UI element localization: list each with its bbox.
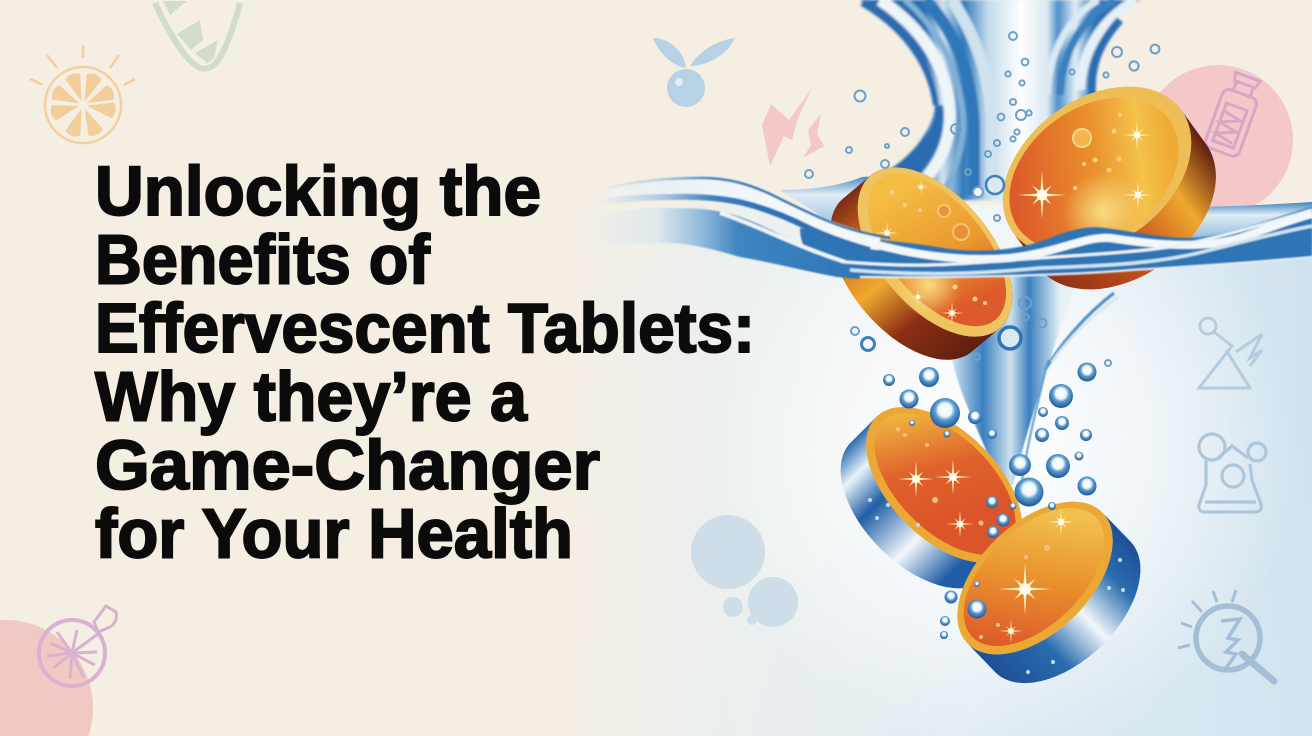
sparkles on lower tablets xyxy=(868,427,1125,674)
rising bubbles upper xyxy=(805,32,1159,366)
wave lower lobe xyxy=(590,208,860,279)
tablet face: upper left xyxy=(842,149,1032,351)
title: Benefits of xyxy=(95,220,431,298)
icon: pink citrus wheel xyxy=(39,606,116,686)
rising bubbles lower xyxy=(883,362,1096,639)
pink circle bottom left xyxy=(0,620,93,736)
icon: bell triangle xyxy=(1199,318,1262,388)
tablet face: upper right xyxy=(980,66,1208,282)
title: for Your Health xyxy=(95,494,573,572)
icon: green leaf xyxy=(155,1,240,69)
tablet: lower right xyxy=(929,473,1169,712)
pink circle top right xyxy=(1143,65,1293,215)
tablet: upper left xyxy=(800,139,1042,388)
title: Why they’re a xyxy=(95,358,528,436)
icon: pink lightning bolts xyxy=(762,88,824,166)
icon: bottle xyxy=(1203,71,1265,158)
icon: orange slice xyxy=(30,45,135,143)
title xyxy=(95,152,755,572)
icon: blue fruit xyxy=(653,38,735,107)
title: Unlocking the xyxy=(95,152,541,230)
tablet: upper right xyxy=(971,52,1248,324)
water wave ribbon xyxy=(580,178,1312,279)
tablet: lower left xyxy=(812,379,1050,617)
wave upper strip xyxy=(580,178,880,250)
tablet face: lower right xyxy=(939,483,1129,671)
tablet face: lower left xyxy=(850,389,1040,579)
icon: magnifier with bolt xyxy=(1178,590,1274,681)
sparkles on upper tablets xyxy=(875,113,1153,325)
wave main body xyxy=(800,207,1312,277)
title: Effervescent Tablets: xyxy=(95,289,755,367)
icon: pale blue bubbles xyxy=(691,515,798,627)
water wave back band xyxy=(780,175,1312,245)
icon: flask xyxy=(1199,434,1266,512)
title: Game-Changer xyxy=(95,426,600,504)
water column upper stream xyxy=(860,0,1140,200)
water column lower funnel xyxy=(950,270,1118,485)
